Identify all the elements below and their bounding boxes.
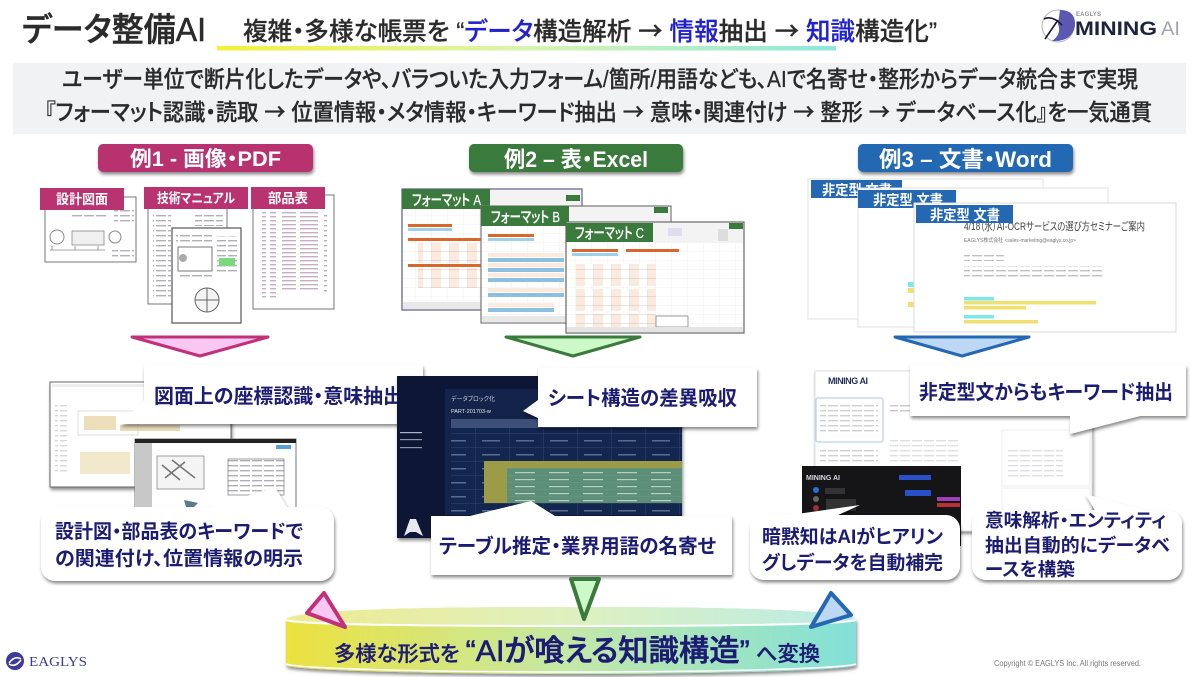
spreadsheet: format A <box>402 189 582 310</box>
callout: coordinate recognition: 図面上の座標認識・意味抽出 <box>154 385 403 408</box>
arrow: down pink <box>132 337 268 356</box>
document: technical manual <box>148 205 241 323</box>
screenshot: dark data table: PART-201703-w <box>451 409 491 415</box>
tag: parts list: 部品表 <box>268 190 308 206</box>
platform: knowledge structure cylinder <box>286 607 856 674</box>
tag: technical manual <box>144 187 248 209</box>
screenshot: drawing coordinate tool <box>50 382 231 487</box>
document sheet 3: email <box>914 203 1176 332</box>
arrow: down green <box>571 579 599 619</box>
callout: sheet structure <box>523 368 757 427</box>
callout: keyword association: 設計図・部品表のキーワードで <box>55 520 303 543</box>
callout: sheet structure: シート構造の差異吸収 <box>548 387 737 410</box>
callout: tacit knowledge: グしデータを自動補完 <box>762 551 943 574</box>
heading: example 1 <box>98 144 313 172</box>
arrow: down green <box>506 337 640 356</box>
callout: keyword extraction from free text <box>910 365 1186 434</box>
tag: format B: フォーマット B <box>491 209 560 226</box>
platform: knowledge structure cylinder: 多様な形式を “AIが喰える知識構造” へ変換 <box>334 635 820 668</box>
callout: semantic analysis <box>972 494 1182 580</box>
screenshot: parts table viewer <box>135 439 296 521</box>
document: parts list <box>253 195 334 309</box>
document sheet 1 <box>808 179 1043 319</box>
subtitle with gradient underline: 複雑・多様な帳票を “データ構造解析 → 情報抽出 → 知識構造化” <box>243 12 937 48</box>
title: データ整備AI <box>22 11 206 48</box>
summary band <box>13 63 1186 134</box>
tag: technical manual: 技術マニュアル <box>157 190 236 206</box>
heading: example 1: 例1 - 画像・PDF <box>130 148 281 171</box>
heading: example 2 <box>469 144 683 172</box>
screenshot: dark hearing chat: MINING AI <box>806 475 840 482</box>
tag: format A <box>402 189 490 209</box>
document sheet 1: 非定型 文書 <box>822 182 892 198</box>
document sheet 2: 非定型 文書 <box>873 192 943 208</box>
screenshot: mining AI inbox: MINING AI <box>828 376 868 386</box>
tag: format B <box>481 206 569 226</box>
document: design drawing <box>45 197 136 262</box>
arrow: down blue <box>895 337 1029 356</box>
logo: Mining AI: MINING <box>1075 19 1157 40</box>
callout: keyword association <box>41 487 334 581</box>
callout: tacit knowledge: 暗黙知はAIがヒアリン <box>762 525 943 548</box>
spreadsheet: format B <box>481 206 671 323</box>
tag: design drawing <box>40 188 124 210</box>
logo: Mining AI: AI <box>1161 19 1180 40</box>
arrow: up blue <box>811 593 851 627</box>
tag: format A: フォーマット A <box>412 192 481 209</box>
document sheet 3: email: EAGLYS株式会社 <sales-marketing@eaglys.co.jp> <box>964 236 1076 244</box>
arrow: up pink <box>307 593 345 627</box>
tag: format C: フォーマット C <box>575 225 644 242</box>
callout: table estimation: テーブル推定・業界用語の名寄せ <box>439 534 716 558</box>
callout: coordinate recognition <box>120 365 423 424</box>
panel: example 2 table/Excel <box>402 144 744 356</box>
heading: example 3: 例3 – 文書・Word <box>879 147 1052 172</box>
logo: EAGLYS <box>6 652 87 670</box>
tag: parts list <box>251 187 325 209</box>
callout: keyword extraction from free text: 非定型文からもキーワード抽出 <box>919 381 1173 404</box>
screenshot: dark data table: データブロック化 <box>451 395 495 403</box>
logo: Mining AI: EAGLYS <box>1076 12 1101 18</box>
screenshot: dark data table <box>397 376 682 538</box>
screenshot: mining AI inbox <box>815 371 1092 531</box>
callout: semantic analysis: 抽出自動的にデータベ <box>985 535 1170 556</box>
summary band: 『フォーマット認識・読取 → 位置情報・メタ情報・キーワード抽出 → 意味・関連付け → 整形 → データベース化』を一気通貫 <box>45 93 1152 127</box>
panel: example 3 document/Word <box>808 144 1176 356</box>
callout: keyword association: の関連付け、位置情報の明示 <box>55 548 303 570</box>
spreadsheet: format C <box>566 222 744 333</box>
heading: example 2: 例2 – 表・Excel <box>504 147 648 172</box>
logo: Mining AI <box>1042 10 1180 42</box>
document sheet 3: email: 非定型 文書 <box>930 207 1000 223</box>
screenshot: dark hearing chat <box>802 466 961 546</box>
document sheet 2 <box>858 188 1108 327</box>
document sheet 3: email: 4/18（水）AI-OCRサービスの選び方セミナーご案内 <box>964 219 1145 233</box>
callout: semantic analysis: 意味解析・エンティティ <box>985 510 1166 531</box>
logo: EAGLYS: EAGLYS <box>29 655 87 670</box>
callout: semantic analysis: ースを構築 <box>985 559 1075 580</box>
callout: table estimation <box>431 501 732 575</box>
tag: design drawing: 設計図面 <box>56 192 108 207</box>
copyright: Copyright © EAGLYS Inc. All rights reserved. <box>994 659 1141 668</box>
callout: tacit knowledge <box>750 505 960 580</box>
panel: example 1 image/PDF <box>40 144 334 356</box>
